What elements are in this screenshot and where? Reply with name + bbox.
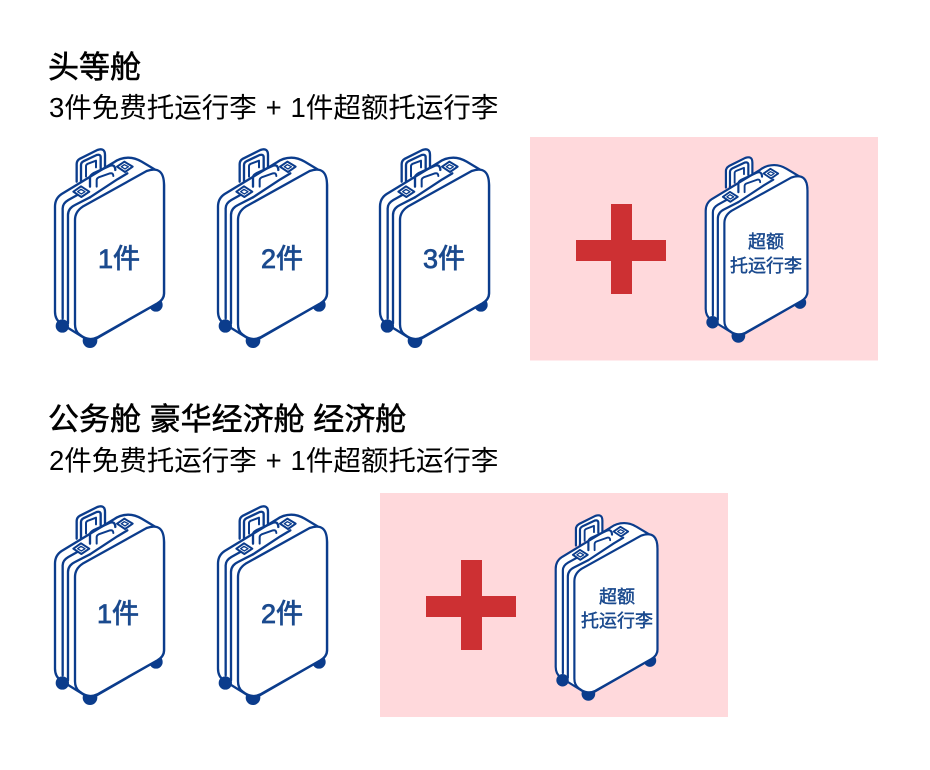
suitcase: piece 2: 2件 bbox=[261, 244, 303, 274]
suitcase: piece 1 bbox=[55, 149, 164, 348]
suitcase: piece 1: 1件 bbox=[98, 244, 140, 274]
subheading: allowance for other cabins: 2件免费托运行李 + 1件超额托运行李 bbox=[49, 445, 498, 476]
subheading: first class allowance: 3件免费托运行李 + 1件超额托运行李 bbox=[49, 92, 498, 123]
suitcase: piece 1: 1件 bbox=[97, 599, 139, 629]
suitcase: piece 3 bbox=[380, 149, 489, 348]
heading: business, premium economy, economy: 公务舱 豪华经济舱 经济舱 bbox=[48, 402, 406, 437]
panel: excess baggage bbox=[380, 493, 728, 717]
suitcase: piece 2 bbox=[218, 506, 327, 705]
suitcase: piece 2 bbox=[218, 149, 327, 348]
suitcase: excess piece: 托运行李 bbox=[581, 611, 653, 631]
suitcase: piece 2: 2件 bbox=[261, 599, 303, 629]
suitcase: excess piece bbox=[706, 157, 807, 343]
icon: plus sign bbox=[576, 204, 666, 294]
suitcase: excess piece: 托运行李 bbox=[730, 256, 802, 276]
panel: excess baggage bbox=[530, 137, 878, 360]
suitcase: piece 1 bbox=[55, 506, 164, 705]
icon: plus sign bbox=[426, 560, 516, 650]
heading: first class: 头等舱 bbox=[48, 50, 141, 85]
suitcase: excess piece: 超额 bbox=[748, 232, 784, 252]
suitcase: excess piece: 超额 bbox=[599, 587, 635, 607]
suitcase: piece 3: 3件 bbox=[423, 244, 465, 274]
section: first class bbox=[48, 50, 878, 360]
section: business and economy classes bbox=[48, 402, 728, 717]
suitcase: excess piece bbox=[556, 515, 657, 701]
